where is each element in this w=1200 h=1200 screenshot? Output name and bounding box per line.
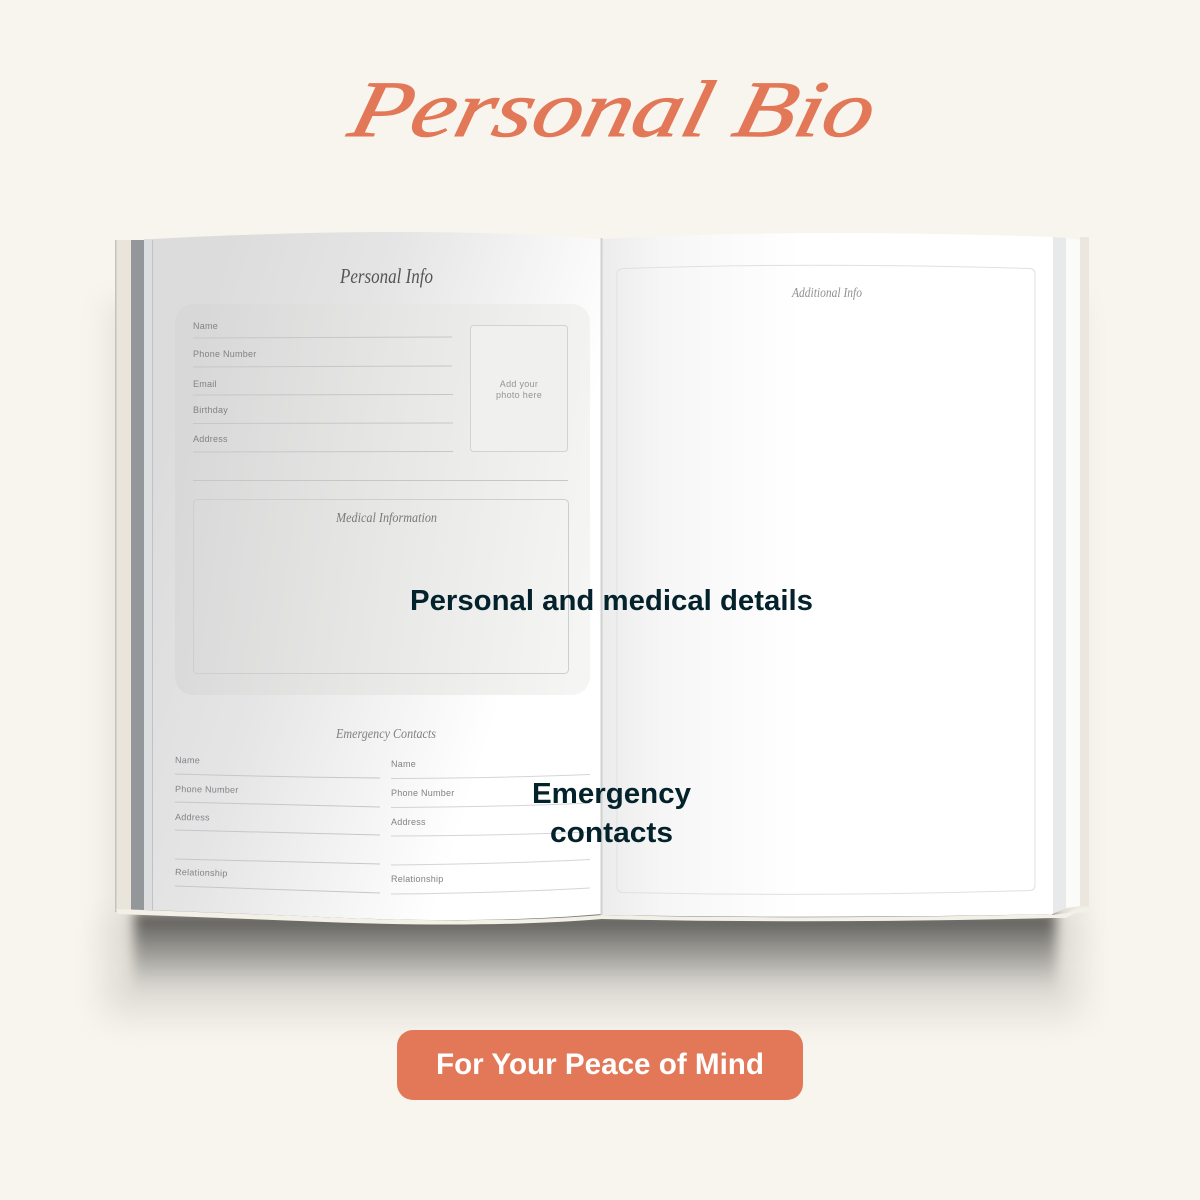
photo box [470, 326, 568, 452]
emergency contacts [175, 726, 590, 894]
contact column 2 [391, 759, 590, 894]
spine line [600, 238, 602, 915]
book bottom edge [116, 909, 1052, 925]
left page edge strips [115, 239, 152, 912]
contact column 2: Name [391, 759, 416, 769]
contact column 2: Phone Number [391, 788, 455, 798]
contact column 2: Address [391, 817, 426, 827]
book shadow [105, 300, 1081, 1020]
personal fields: Phone Number [193, 349, 257, 359]
panel: personal and medical [175, 304, 590, 695]
callout: emergency contacts: contacts [550, 817, 673, 849]
right page edge strips [1052, 237, 1089, 918]
emergency contacts: Emergency Contacts [335, 726, 436, 741]
contact column 1: Phone Number [175, 784, 239, 795]
right page frame: Additional Info: Additional Info [791, 286, 862, 301]
medical information box [194, 500, 568, 674]
personal fields [193, 321, 568, 480]
contact column 1: Relationship [175, 867, 228, 878]
contact column 1: Address [175, 812, 210, 822]
callout: personal and medical details: Personal and medical details [410, 585, 813, 617]
personal fields: Birthday [193, 405, 228, 415]
left page [152, 232, 601, 920]
photo box: Add your [500, 379, 538, 389]
open book [115, 232, 1089, 925]
contact column 1: Name [175, 755, 200, 765]
button: for your peace of mind: For Your Peace of Mind [436, 1048, 764, 1081]
callout: emergency contacts: Emergency [532, 778, 691, 810]
right page [602, 233, 1053, 917]
button: for your peace of mind [397, 1030, 803, 1100]
contact column 1 [175, 755, 380, 893]
left page heading: Personal Info: Personal Info [339, 264, 433, 288]
personal fields: Name [193, 321, 218, 331]
callout: emergency contacts [532, 778, 691, 849]
right page frame: Additional Info [617, 265, 1035, 894]
contact column 2: Relationship [391, 874, 444, 884]
personal fields: Address [193, 434, 228, 444]
personal fields: Email [193, 379, 217, 389]
photo box: photo here [496, 390, 542, 400]
title: Personal Bio [340, 65, 886, 154]
medical information box: Medical Information [335, 510, 437, 525]
